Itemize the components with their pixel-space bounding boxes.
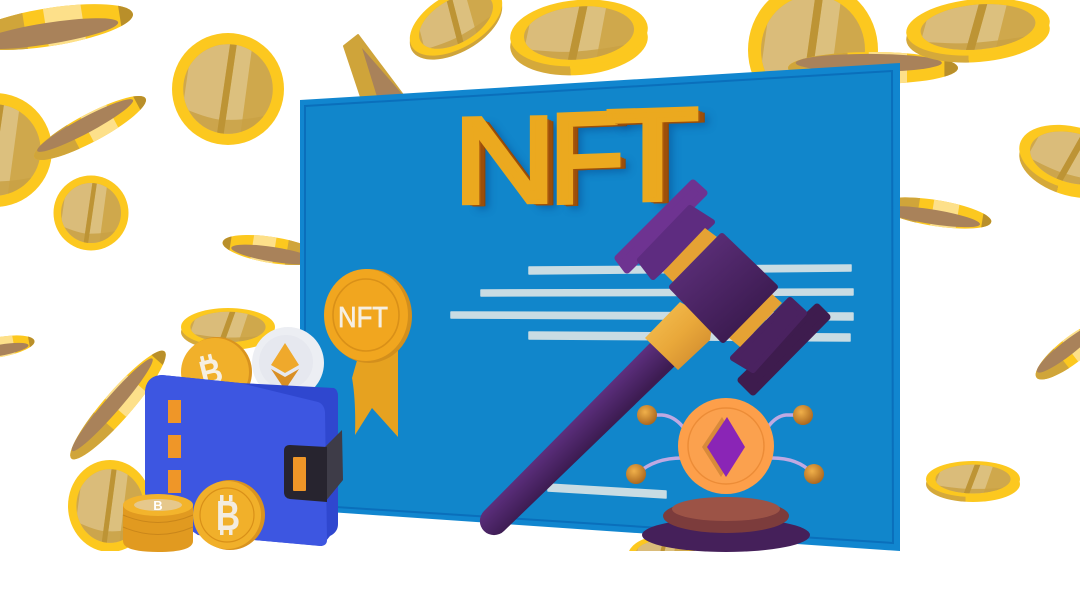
upper gold ring — [663, 228, 717, 282]
ribbon — [352, 345, 398, 437]
coin: under gavel base — [629, 539, 695, 551]
coin: bitcoin front: B — [216, 494, 240, 540]
coin: lower left behind wallet — [68, 460, 152, 552]
coin: bitcoin front — [193, 480, 265, 550]
coin: ethereum — [252, 327, 324, 399]
coin: top right large — [748, 0, 878, 72]
circuit wires — [638, 415, 812, 473]
coin: top centre thick — [510, 0, 648, 76]
heading: NFT 3D letters — [453, 80, 710, 230]
coin stack — [123, 494, 193, 552]
wallet — [145, 375, 343, 546]
coin: large face-on — [172, 33, 284, 145]
gavel sound block — [642, 497, 810, 552]
coin: tilted lower left — [70, 350, 166, 460]
coin: small left — [54, 176, 128, 250]
coin: tilted thin left — [34, 96, 146, 160]
coin: left edge — [0, 93, 52, 207]
text lines on certificate — [451, 265, 853, 498]
heading: NFT 3D letters: T — [606, 80, 699, 229]
gavel barrel — [672, 236, 775, 340]
coin: top tilted behind panel — [344, 35, 403, 100]
coin: bitcoin behind wallet: B — [196, 351, 227, 395]
panel: blue certificate — [300, 63, 900, 551]
icon: token with circuit nodes — [626, 398, 824, 494]
wallet strap — [284, 430, 343, 502]
gavel collar — [645, 302, 713, 370]
coin: right behind panel — [900, 197, 992, 229]
coin: top small tilted — [410, 0, 502, 60]
coin: above wallet flat — [181, 308, 275, 350]
upper disc — [618, 183, 704, 270]
coin stack: B — [153, 498, 163, 513]
coin: right edge lower — [1036, 328, 1080, 380]
coin: flat behind panel top right — [788, 52, 958, 84]
coin: bitcoin behind wallet — [181, 337, 252, 407]
lower disc — [741, 307, 827, 392]
upper cap — [640, 208, 712, 277]
circuit nodes — [637, 405, 657, 425]
coin: behind panel left — [222, 235, 300, 265]
heading: NFT 3D letters: N — [453, 91, 556, 229]
gavel handle — [480, 340, 677, 535]
coin: top left flat — [0, 4, 133, 50]
lower cap — [733, 300, 804, 370]
coin: top right thick — [906, 0, 1050, 63]
wallet stitches — [168, 400, 181, 493]
medal label: NFT — [338, 302, 388, 334]
heading: NFT 3D letters: F — [549, 85, 624, 230]
coin: right edge — [1019, 124, 1080, 198]
gavel — [480, 183, 827, 535]
lower gold ring — [728, 294, 782, 347]
medal: NFT ribbon badge — [324, 269, 412, 437]
coin: lower right — [926, 461, 1020, 502]
diamond — [707, 417, 745, 477]
coin: far left small — [0, 335, 34, 358]
